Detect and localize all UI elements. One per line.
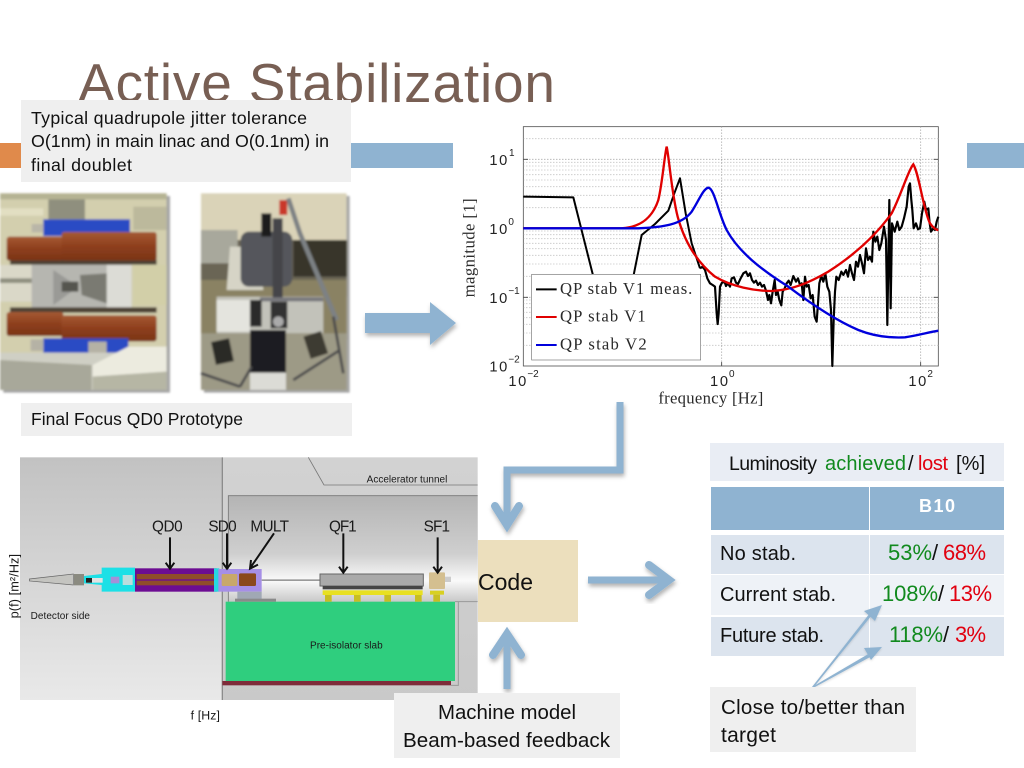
callout: jitter tolerance: Typical quadrupole jitter tolerance <box>31 108 307 128</box>
table title: / <box>908 453 914 475</box>
row: current stabilisation: / <box>938 581 945 606</box>
component labels and pointers: SD0 <box>208 519 237 536</box>
y axis ticks: 10 <box>489 222 507 238</box>
photo: stabilisation sensor <box>201 193 350 393</box>
component labels and pointers <box>152 519 450 573</box>
leftover y-axis label: p(f) [m²/Hz] <box>7 554 21 618</box>
x axis ticks: 10 <box>508 374 526 390</box>
arrow: photos to chart <box>365 302 456 345</box>
legend: QP stab V1 <box>560 307 646 326</box>
x axis ticks: 0 <box>729 369 735 380</box>
callout: close to target <box>710 687 916 752</box>
pre-isolator slab: Pre-isolator slab <box>310 641 383 652</box>
row: future stabilisation: 3% <box>955 622 986 647</box>
pre-isolator slab <box>222 602 455 685</box>
row: current stabilisation: 108% <box>882 581 938 606</box>
x axis ticks: −2 <box>527 369 539 380</box>
row: future stabilisation: / <box>943 622 950 647</box>
box: machine model and feedback: Beam-based feedback <box>403 729 611 752</box>
row: future stabilisation <box>711 617 1004 656</box>
y axis ticks: 10 <box>489 153 507 169</box>
box: machine model and feedback: Machine model <box>438 702 576 724</box>
row: no stabilisation: No stab. <box>720 543 796 565</box>
legend: QP stab V2 <box>560 334 647 353</box>
callout: close to target: target <box>721 724 776 747</box>
x axis ticks <box>508 369 933 390</box>
y axis ticks: −1 <box>508 286 520 297</box>
row: current stabilisation: Current stab. <box>720 584 836 606</box>
y axis label: magnitude [1] <box>459 198 478 297</box>
table header <box>711 487 1004 530</box>
label: detector side: Detector side <box>31 611 90 622</box>
row: current stabilisation: 13% <box>949 581 992 606</box>
y axis ticks: 0 <box>508 217 514 228</box>
table title: achieved <box>825 453 906 475</box>
box: Code <box>478 540 578 622</box>
label: accelerator tunnel: Accelerator tunnel <box>367 474 447 485</box>
row: current stabilisation <box>711 575 1004 615</box>
series: QP stab V1 <box>523 147 938 291</box>
photo: quadrupole magnet prototype <box>0 193 170 393</box>
y axis ticks: −2 <box>508 355 520 366</box>
caption: Final Focus QD0 Prototype: Final Focus QD0 Prototype <box>31 409 243 429</box>
row: no stabilisation: 53% <box>888 540 932 565</box>
arrow: model to code <box>493 634 521 689</box>
callout: jitter tolerance: O(1nm) in main linac and O(0.1nm) in <box>31 131 329 151</box>
diagram: final doublet layout <box>7 457 478 722</box>
callout: jitter tolerance: final doublet <box>31 155 132 175</box>
decorative header band: blue right <box>967 143 1024 168</box>
row: no stabilisation <box>711 535 1004 574</box>
beamline components <box>29 568 451 602</box>
x axis label: frequency [Hz] <box>658 388 763 407</box>
x axis ticks: 10 <box>908 374 926 390</box>
caption: Final Focus QD0 Prototype <box>21 403 352 436</box>
line chart: frequency response <box>459 127 938 407</box>
row: no stabilisation: / <box>932 540 939 565</box>
component labels and pointers: QF1 <box>329 519 357 536</box>
x axis ticks: 2 <box>927 369 933 380</box>
y axis ticks: 10 <box>489 291 507 307</box>
arrow: code to results <box>588 565 669 595</box>
x axis ticks: 10 <box>710 374 728 390</box>
table title: Luminosity <box>729 453 817 475</box>
box: Code: Code <box>478 569 533 595</box>
decorative header band: orange <box>0 143 22 168</box>
callout: jitter tolerance <box>21 100 351 182</box>
arrow: chart to code <box>495 402 620 525</box>
row: future stabilisation: Future stab. <box>720 625 824 647</box>
y axis ticks: 10 <box>489 360 507 376</box>
y axis ticks: 1 <box>509 148 515 159</box>
box: machine model and feedback <box>394 693 620 758</box>
title: Active Stabilization <box>78 52 555 114</box>
component labels and pointers: MULT <box>250 519 290 536</box>
legend: QP stab V1 meas. <box>560 279 692 298</box>
legend <box>532 274 701 360</box>
table header: B10 <box>919 496 955 516</box>
table title: [%] <box>956 453 985 475</box>
row: no stabilisation: 68% <box>943 540 986 565</box>
component labels and pointers: QD0 <box>152 519 183 536</box>
leftover x-axis label: f [Hz] <box>191 708 220 722</box>
callout arrows: to current and future stab values <box>812 605 882 687</box>
y axis ticks <box>489 148 520 376</box>
series: QP stab V1 measured <box>523 178 938 366</box>
results table <box>711 487 1004 656</box>
component labels and pointers: SF1 <box>424 519 450 536</box>
row: future stabilisation: 118% <box>889 622 943 647</box>
callout: close to target: Close to/better than <box>721 696 905 719</box>
decorative header band: blue middle <box>350 143 453 168</box>
table title: lost <box>918 453 948 475</box>
series: QP stab V2 <box>523 188 938 337</box>
table title <box>710 443 1004 481</box>
